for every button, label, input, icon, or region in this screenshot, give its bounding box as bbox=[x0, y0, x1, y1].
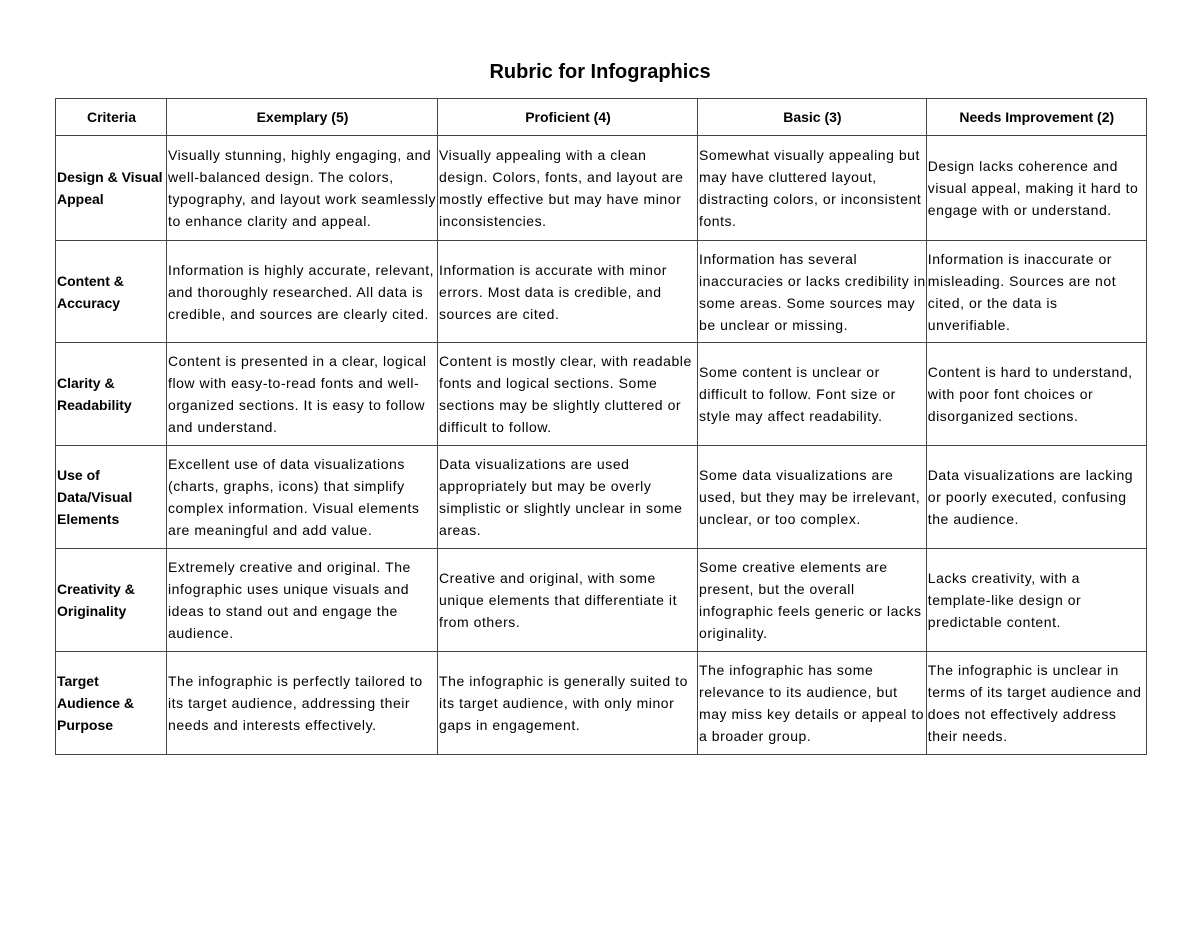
row: use of data/visual elements: used, but they may be irrelevant, bbox=[699, 489, 920, 505]
row: creativity & originality: audience. bbox=[168, 625, 234, 641]
row: target audience & purpose: its target audience, addressing their bbox=[168, 695, 410, 711]
row: design & visual appeal: Visually appealing with a clean bbox=[439, 147, 646, 163]
row: target audience & purpose: needs and interests effectively. bbox=[168, 717, 377, 733]
row: creativity & originality: Some creative elements are bbox=[699, 559, 888, 575]
row: content & accuracy: some areas. Some sources may bbox=[699, 294, 915, 310]
row: target audience & purpose: a broader group. bbox=[699, 728, 811, 744]
row: design & visual appeal: Design lacks coherence and bbox=[928, 158, 1118, 174]
row: use of data/visual elements: unclear, or too complex. bbox=[699, 511, 861, 527]
row: design & visual appeal bbox=[57, 147, 1138, 229]
row: content & accuracy: Accuracy bbox=[57, 294, 120, 310]
row: content & accuracy: be unclear or missing. bbox=[699, 316, 848, 332]
row: design & visual appeal: visual appeal, making it hard to bbox=[928, 180, 1138, 196]
rubric table bbox=[55, 98, 1147, 755]
row: creativity & originality: template-like design or bbox=[928, 592, 1081, 608]
row: content & accuracy: cited, or the data is bbox=[928, 294, 1058, 310]
row: creativity & originality: originality. bbox=[699, 625, 768, 641]
row: creativity & originality: predictable content. bbox=[928, 614, 1061, 630]
row: creativity & originality: infographic feels generic or lacks bbox=[699, 603, 922, 619]
row: target audience & purpose: Purpose bbox=[57, 717, 113, 733]
row: creativity & originality: from others. bbox=[439, 614, 520, 630]
row: target audience & purpose: The infographic is perfectly tailored to bbox=[168, 673, 423, 689]
row: use of data/visual elements: Use of bbox=[57, 467, 100, 483]
row: content & accuracy: credible, and sources are clearly cited. bbox=[168, 306, 429, 322]
row: target audience & purpose: does not effectively address bbox=[928, 706, 1116, 722]
row: clarity & readability: organized sections. It is easy to follow bbox=[168, 397, 425, 413]
row: clarity & readability: Content is presented in a clear, logical bbox=[168, 353, 427, 369]
row: use of data/visual elements: the audience. bbox=[928, 511, 1019, 527]
row: clarity & readability: Readability bbox=[57, 397, 132, 413]
row: design & visual appeal: well-balanced design. The colors, bbox=[168, 169, 394, 185]
row: content & accuracy: and thoroughly researched. All data is bbox=[168, 284, 423, 300]
row: design & visual appeal: inconsistencies. bbox=[439, 213, 547, 229]
row: use of data/visual elements: Some data visualizations are bbox=[699, 467, 893, 483]
row: use of data/visual elements: are meaningful and add value. bbox=[168, 522, 372, 538]
title: Rubric for Infographics bbox=[489, 61, 711, 83]
row: target audience & purpose: relevance to its audience, but bbox=[699, 684, 898, 700]
header row: Exemplary (5) bbox=[257, 109, 348, 125]
row: content & accuracy: Information has several bbox=[699, 250, 857, 266]
row: use of data/visual elements: or poorly executed, confusing bbox=[928, 489, 1127, 505]
header row: Criteria bbox=[87, 109, 136, 125]
row: use of data/visual elements: (charts, graphs, icons) that simplify bbox=[168, 478, 405, 494]
row: target audience & purpose: gaps in engagement. bbox=[439, 717, 580, 733]
row: design & visual appeal: engage with or understand. bbox=[928, 202, 1112, 218]
row: design & visual appeal: typography, and layout work seamlessly bbox=[168, 191, 436, 207]
row: design & visual appeal: design. Colors, fonts, and layout are bbox=[439, 169, 683, 185]
row: use of data/visual elements bbox=[57, 456, 1133, 538]
row: creativity & originality: Lacks creativity, with a bbox=[928, 570, 1080, 586]
row: clarity & readability: Content is hard to understand, bbox=[928, 364, 1133, 380]
row: clarity & readability: style may affect readability. bbox=[699, 408, 883, 424]
row: design & visual appeal: distracting colors, or inconsistent bbox=[699, 191, 921, 207]
row: clarity & readability: disorganized sections. bbox=[928, 408, 1078, 424]
row: design & visual appeal: mostly effective but may have minor bbox=[439, 191, 681, 207]
row: content & accuracy: Content & bbox=[57, 272, 124, 288]
row: design & visual appeal: Appeal bbox=[57, 191, 104, 207]
row: creativity & originality: ideas to stand out and engage the bbox=[168, 603, 398, 619]
row: content & accuracy: unverifiable. bbox=[928, 316, 1010, 332]
row: clarity & readability: difficult to follow. Font size or bbox=[699, 386, 896, 402]
row: use of data/visual elements: Data visualizations are used bbox=[439, 456, 630, 472]
row: creativity & originality: Extremely creative and original. The bbox=[168, 559, 411, 575]
row: content & accuracy: sources are cited. bbox=[439, 306, 559, 322]
row: use of data/visual elements: Excellent use of data visualizations bbox=[168, 456, 405, 472]
row: design & visual appeal: fonts. bbox=[699, 213, 737, 229]
row: clarity & readability: Clarity & bbox=[57, 375, 115, 391]
row: use of data/visual elements: Elements bbox=[57, 511, 119, 527]
row: target audience & purpose: The infographic is unclear in bbox=[928, 662, 1119, 678]
row: clarity & readability: Some content is unclear or bbox=[699, 364, 880, 380]
row: use of data/visual elements: Data visualizations are lacking bbox=[928, 467, 1133, 483]
row: content & accuracy: inaccuracies or lacks credibility in bbox=[699, 272, 926, 288]
row: creativity & originality: unique elements that differentiate it bbox=[439, 592, 677, 608]
row: target audience & purpose: The infographic is generally suited to bbox=[439, 673, 688, 689]
row: clarity & readability: fonts and logical sections. Some bbox=[439, 375, 657, 391]
row: content & accuracy: errors. Most data is credible, and bbox=[439, 284, 662, 300]
row: clarity & readability: flow with easy-to-read fonts and well- bbox=[168, 375, 419, 391]
row: clarity & readability bbox=[57, 353, 1133, 435]
row: design & visual appeal: Visually stunning, highly engaging, and bbox=[168, 147, 431, 163]
row: content & accuracy: Information is inaccurate or bbox=[928, 250, 1112, 266]
row: target audience & purpose: Audience & bbox=[57, 695, 134, 711]
row: design & visual appeal: may have cluttered layout, bbox=[699, 169, 877, 185]
row: creativity & originality: Creativity & bbox=[57, 581, 135, 597]
row: target audience & purpose: terms of its target audience and bbox=[928, 684, 1141, 700]
header row: Proficient (4) bbox=[525, 109, 611, 125]
header row bbox=[57, 109, 1141, 744]
row: content & accuracy: Information is accurate with minor bbox=[439, 262, 667, 278]
row: target audience & purpose: its target audience, with only minor bbox=[439, 695, 674, 711]
row: use of data/visual elements: appropriately but may be overly bbox=[439, 478, 651, 494]
row: content & accuracy: Information is highly accurate, relevant, bbox=[168, 262, 434, 278]
row: creativity & originality: present, but the overall bbox=[699, 581, 855, 597]
row: creativity & originality bbox=[57, 559, 1081, 641]
row: clarity & readability: with poor font choices or bbox=[928, 386, 1093, 402]
row: use of data/visual elements: areas. bbox=[439, 522, 481, 538]
row: creativity & originality: Creative and original, with some bbox=[439, 570, 656, 586]
row: clarity & readability: Content is mostly clear, with readable bbox=[439, 353, 692, 369]
row: target audience & purpose: Target bbox=[57, 673, 99, 689]
row: target audience & purpose: their needs. bbox=[928, 728, 1008, 744]
row: creativity & originality: Originality bbox=[57, 603, 126, 619]
row: content & accuracy: misleading. Sources are not bbox=[928, 272, 1116, 288]
header row: Basic (3) bbox=[783, 109, 842, 125]
row: target audience & purpose: may miss key details or appeal to bbox=[699, 706, 924, 722]
row: use of data/visual elements: simplistic or slightly unclear in some bbox=[439, 500, 682, 516]
row: clarity & readability: and understand. bbox=[168, 419, 277, 435]
row: clarity & readability: sections may be slightly cluttered or bbox=[439, 397, 681, 413]
row: target audience & purpose: The infographic has some bbox=[699, 662, 873, 678]
row: content & accuracy bbox=[57, 250, 1116, 333]
row: use of data/visual elements: Data/Visual bbox=[57, 489, 132, 505]
row: clarity & readability: difficult to follow. bbox=[439, 419, 552, 435]
row: creativity & originality: infographic uses unique visuals and bbox=[168, 581, 409, 597]
row: target audience & purpose bbox=[57, 662, 1141, 744]
row: design & visual appeal: Somewhat visually appealing but bbox=[699, 147, 920, 163]
row: design & visual appeal: to enhance clarity and appeal. bbox=[168, 213, 371, 229]
row: design & visual appeal: Design & Visual bbox=[57, 169, 163, 185]
row: use of data/visual elements: complex information. Visual elements bbox=[168, 500, 419, 516]
header row: Needs Improvement (2) bbox=[959, 109, 1114, 125]
